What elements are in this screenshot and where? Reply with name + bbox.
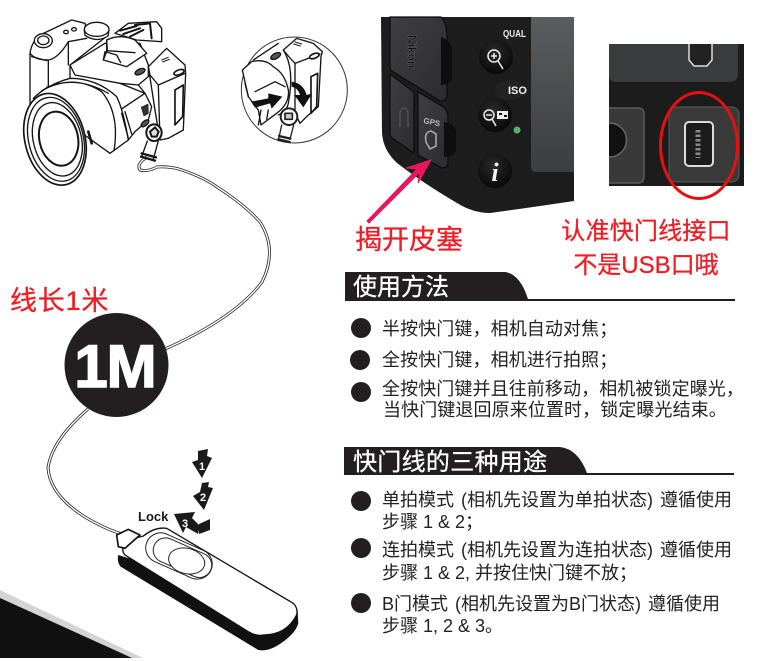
arrow 3 lock: 3 [182, 518, 188, 530]
inset circle: connector detail [241, 37, 347, 143]
heading: three uses: 快门线的三种用途 [353, 449, 547, 476]
port panel background [609, 44, 744, 186]
caption: port note: 认准快门线接口 [561, 218, 731, 245]
use 1 [351, 490, 732, 532]
use 1: 步骤 1 & 2； [382, 512, 483, 532]
LCD screen [531, 17, 574, 172]
GPS port icon and headphone icon [400, 108, 436, 149]
pink arrow to flap [367, 160, 431, 223]
rubber flaps [390, 17, 448, 168]
remote body [123, 528, 297, 635]
caption: port note: 不是USB口哦 [573, 252, 719, 279]
left plate with round socket [609, 107, 645, 184]
ISO button: ISO [508, 85, 527, 97]
flap labels [405, 35, 442, 129]
use 3: 步骤 1, 2 & 3。 [382, 616, 503, 636]
red ellipse highlight [660, 92, 738, 198]
camera body [381, 17, 574, 213]
right plate [669, 107, 739, 182]
button [141, 528, 217, 584]
usage list [350, 318, 744, 420]
cable: camera to 1M badge [139, 157, 270, 349]
remote shadow [118, 555, 298, 650]
photo: camera back with rubber flap [381, 17, 574, 213]
QUAL button [479, 29, 526, 74]
step 1: 半按快门键，相机自动对焦； [382, 319, 617, 339]
shutter port [685, 122, 713, 166]
cable: 1M badge to remote [48, 409, 122, 534]
arrow 2: 2 [200, 492, 206, 504]
upper plate [609, 44, 738, 82]
step arrows [138, 449, 213, 534]
step 3 [351, 379, 744, 420]
lock label: Lock [138, 509, 169, 524]
camera line drawing [15, 20, 186, 192]
use 2: 连拍模式 (相机先设置为连拍状态) 遵循使用 [382, 540, 732, 560]
caption: port note [561, 218, 731, 279]
remote shutter release [117, 528, 298, 650]
QUAL button: QUAL [503, 29, 526, 40]
1M badge [64, 313, 168, 417]
heading: usage [345, 272, 735, 301]
info button [478, 154, 512, 188]
1M badge: 1M [74, 333, 156, 400]
flap labels: GPS [423, 116, 442, 129]
use 3 [351, 593, 720, 636]
green indicator [514, 126, 520, 134]
use 2 [351, 538, 732, 583]
inset outline [241, 37, 347, 143]
inset plug [278, 108, 297, 142]
info button: i [491, 158, 499, 187]
step 3: 全按快门键并且往前移动，相机被锁定曝光， [382, 379, 744, 399]
ISO button [478, 80, 527, 132]
cable plug [117, 529, 140, 548]
heading: three uses [344, 447, 734, 476]
cable length label: 线长1米 [10, 286, 109, 316]
upper port [689, 44, 712, 66]
inset camera detail [242, 38, 322, 125]
arrow 1: 1 [199, 461, 205, 473]
use 3: B门模式 (相机先设置为B门状态) 遵循使用 [382, 594, 720, 614]
inset arrows [251, 82, 312, 109]
heading: usage: 使用方法 [353, 274, 449, 301]
use 1: 单拍模式 (相机先设置为单拍状态) 遵循使用 [382, 490, 732, 510]
step 2: 全按快门键，相机进行拍照； [382, 350, 617, 370]
flap tabs [441, 37, 456, 157]
use 2: 步骤 1 & 2, 并按住快门键不放； [382, 563, 637, 583]
caption: open flap: 揭开皮塞 [355, 225, 463, 255]
step 3: 当快门键退回原来位置时，锁定曝光结束。 [383, 400, 727, 420]
flap labels: Nikon [405, 35, 419, 68]
bottom-left corner wedge [0, 590, 143, 658]
uses list [351, 490, 732, 636]
photo: shutter-release port [609, 44, 744, 186]
